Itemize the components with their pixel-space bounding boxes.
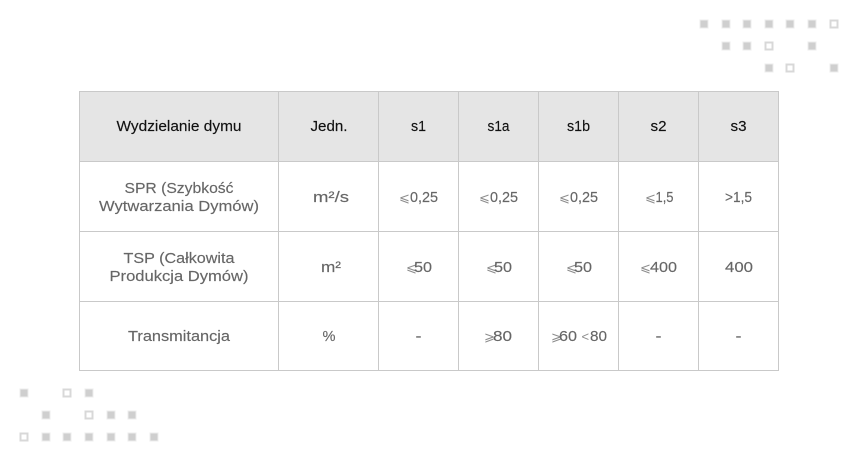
header row: s1a [488, 118, 510, 135]
row: Transmitancja: % [322, 328, 336, 345]
row: SPR: ⩽ [559, 190, 570, 205]
row: Transmitancja: 80 [590, 328, 607, 345]
row: SPR: >1,5 [725, 189, 752, 206]
row: TSP: ⩽ [566, 260, 577, 275]
row: SPR: 0,25 [410, 189, 438, 206]
row: SPR: 0,25 [490, 189, 518, 206]
row: SPR [99, 180, 752, 215]
row: TSP: ⩽ [406, 260, 417, 275]
row: Transmitancja: - [736, 328, 742, 345]
row: TSP: TSP (Całkowita [124, 250, 235, 267]
decorative squares: top right [700, 20, 838, 72]
row: TSP: ⩽ [640, 260, 651, 275]
header row: s2 [650, 118, 666, 135]
row: TSP: 50 [574, 259, 592, 276]
row: TSP: Produkcja Dymów) [110, 268, 248, 285]
row: Transmitancja [128, 328, 742, 345]
row: Transmitancja: Transmitancja [128, 328, 231, 345]
row: SPR: m²/s [313, 189, 349, 206]
row: Transmitancja: < [582, 329, 589, 344]
table grid [80, 92, 778, 370]
row: TSP: m² [321, 259, 341, 276]
row: SPR: ⩽ [399, 190, 410, 205]
header row [116, 118, 746, 135]
row: Transmitancja: ⩾ [484, 329, 495, 344]
table [80, 92, 778, 370]
row: SPR: ⩽ [479, 190, 490, 205]
header row: Jedn. [310, 118, 348, 135]
row: TSP: ⩽ [486, 260, 497, 275]
row: Transmitancja: 80 [493, 328, 512, 345]
row: SPR: Wytwarzania Dymów) [99, 198, 259, 215]
row: Transmitancja: ⩾ [551, 329, 562, 344]
table header background [80, 92, 778, 162]
row: TSP: 50 [494, 259, 512, 276]
row: Transmitancja: - [416, 328, 422, 345]
row: TSP: 400 [650, 259, 677, 276]
header row: Wydzielanie dymu [116, 118, 242, 135]
row: Transmitancja: - [656, 328, 662, 345]
row: SPR: 1,5 [656, 189, 674, 206]
row: TSP [110, 250, 753, 285]
row: SPR: 0,25 [570, 189, 598, 206]
row: SPR: SPR (Szybkość [124, 180, 234, 197]
header row: s1b [567, 118, 590, 135]
row: Transmitancja: 60 [559, 328, 577, 345]
row: TSP: 400 [725, 259, 753, 276]
header row: s1 [411, 118, 426, 135]
header row: s3 [730, 118, 746, 135]
row: SPR: ⩽ [645, 190, 656, 205]
decorative squares: bottom left [20, 389, 158, 441]
row: TSP: 50 [414, 259, 432, 276]
